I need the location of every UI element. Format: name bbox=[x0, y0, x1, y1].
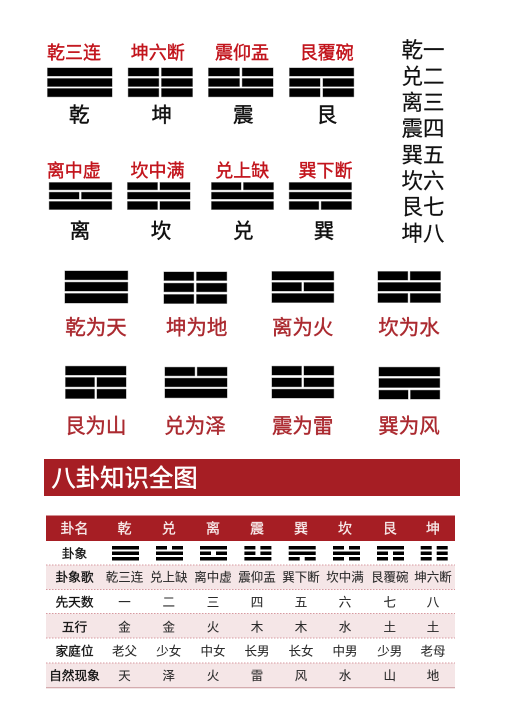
trigram: 艮覆碗 bbox=[289, 43, 354, 127]
symbol: 兑为泽 bbox=[164, 367, 227, 438]
row: 卦象歌: 坤六断 bbox=[414, 570, 452, 584]
symbol: 坎为水: 坎为水 bbox=[378, 316, 440, 340]
row: 卦象歌: 离中虚 bbox=[194, 570, 232, 584]
row: 卦象 with small trigram icons bbox=[62, 546, 448, 561]
row: 先天数: 先天数 bbox=[55, 596, 94, 610]
row: 先天数: 五 bbox=[295, 596, 307, 610]
symbol: 巽为风 bbox=[378, 367, 440, 438]
text block: pre-heaven numbers: 震四 bbox=[401, 117, 445, 141]
row: 家庭位: 中男 bbox=[332, 644, 358, 658]
row: 先天数: 六 bbox=[339, 596, 351, 610]
row: 卦象歌: 巽下断 bbox=[282, 570, 320, 584]
trigram: 离中虚 bbox=[47, 161, 112, 243]
symbol: 震为雷: 震为雷 bbox=[272, 415, 333, 438]
trigram: 坤六断: 坤 bbox=[151, 104, 172, 127]
trigram: 兑上缺 bbox=[211, 161, 274, 243]
table header row: 艮 bbox=[383, 520, 397, 536]
row: 卦象 with small trigram icons: 卦象 bbox=[62, 547, 87, 561]
text block: pre-heaven numbers: 乾一 bbox=[401, 38, 445, 62]
row: 自然现象: 天 bbox=[118, 669, 131, 683]
row: 家庭位: 少男 bbox=[377, 644, 402, 658]
row: 卦象歌: 乾三连 bbox=[106, 570, 144, 584]
row: 家庭位 bbox=[55, 644, 446, 658]
row: 家庭位: 长女 bbox=[288, 644, 314, 658]
row: 家庭位: 中女 bbox=[200, 644, 226, 658]
table header row: 震 bbox=[250, 520, 264, 536]
row: 自然现象: 自然现象 bbox=[49, 668, 100, 683]
heading banner bbox=[44, 459, 460, 496]
row: 五行 bbox=[62, 620, 439, 634]
table header row: 坤 bbox=[426, 520, 440, 536]
trigram: 乾三连: 乾 bbox=[69, 104, 90, 127]
table header row bbox=[46, 516, 455, 541]
symbol: 震为雷 bbox=[272, 366, 334, 438]
text block: pre-heaven numbers: 艮七 bbox=[401, 196, 445, 220]
row: 先天数: 七 bbox=[383, 596, 396, 610]
symbol: 坎为水 bbox=[378, 271, 441, 340]
trigram: 离中虚: 离 bbox=[70, 220, 90, 243]
row: 自然现象 bbox=[49, 668, 440, 683]
trigram: 乾三连 bbox=[47, 43, 112, 127]
symbol: 兑为泽: 兑为泽 bbox=[164, 415, 226, 438]
row: 先天数: 二 bbox=[162, 596, 175, 610]
table header row: 兑 bbox=[162, 520, 176, 536]
row: 自然现象: 风 bbox=[295, 669, 308, 683]
trigram: 坤六断 bbox=[128, 43, 193, 127]
row: 自然现象: 山 bbox=[383, 669, 396, 683]
symbol: 坤为地 bbox=[164, 272, 227, 340]
row: 卦象歌: 坎中满 bbox=[326, 570, 364, 584]
trigram: 兑上缺: 兑 bbox=[233, 220, 254, 243]
heading banner: 八卦知识全图 bbox=[51, 466, 198, 492]
row: 先天数: 一 bbox=[118, 596, 131, 610]
row: 卦象歌: 震仰盂 bbox=[238, 570, 276, 584]
trigram: 坎中满: 坎中满 bbox=[130, 161, 184, 181]
row: 卦象歌: 卦象歌 bbox=[55, 570, 94, 584]
trigram: 巽下断 bbox=[289, 161, 352, 243]
row: 卦象歌: 艮覆碗 bbox=[371, 570, 408, 584]
trigram: 坎中满 bbox=[127, 161, 190, 243]
symbol: 艮为山 bbox=[65, 366, 126, 438]
text block: pre-heaven numbers: 离三 bbox=[401, 91, 445, 115]
row: 自然现象: 火 bbox=[207, 669, 220, 683]
text block: pre-heaven numbers: 兑二 bbox=[401, 65, 445, 89]
table header row: 离 bbox=[206, 520, 220, 536]
row: 自然现象: 泽 bbox=[162, 669, 175, 683]
row: 自然现象: 地 bbox=[427, 669, 440, 683]
row: 五行: 火 bbox=[207, 620, 220, 634]
trigram: 离中虚: 离中虚 bbox=[47, 161, 101, 181]
symbol: 离为火: 离为火 bbox=[272, 316, 333, 340]
trigram: 乾三连: 乾三连 bbox=[47, 43, 101, 63]
row: 五行: 木 bbox=[251, 620, 264, 634]
trigram: 坤六断: 坤六断 bbox=[131, 43, 185, 63]
row: 五行: 金 bbox=[162, 620, 175, 634]
row: 卦象歌: 兑上缺 bbox=[150, 570, 188, 584]
trigram: 震仰盂: 震仰盂 bbox=[215, 43, 269, 63]
text block: pre-heaven numbers: 巽五 bbox=[401, 144, 445, 168]
row: 五行: 五行 bbox=[62, 620, 87, 634]
trigram: 兑上缺: 兑上缺 bbox=[215, 161, 269, 181]
symbol: 乾为天: 乾为天 bbox=[65, 316, 127, 340]
row: 先天数: 八 bbox=[427, 596, 440, 610]
trigram: 坎中满: 坎 bbox=[151, 220, 171, 243]
symbol: 巽为风: 巽为风 bbox=[378, 415, 440, 438]
row: 五行: 木 bbox=[295, 620, 308, 634]
row: 先天数 bbox=[55, 596, 440, 610]
trigram: 艮覆碗: 艮覆碗 bbox=[300, 43, 354, 63]
row: 家庭位: 家庭位 bbox=[55, 644, 94, 658]
symbol: 乾为天 bbox=[65, 271, 128, 340]
row: 先天数: 三 bbox=[207, 596, 219, 610]
trigram: 震仰盂 bbox=[208, 43, 273, 127]
text block: pre-heaven numbers bbox=[401, 38, 445, 246]
trigram: 巽下断: 巽 bbox=[314, 220, 334, 243]
trigram: 艮覆碗: 艮 bbox=[316, 104, 337, 127]
symbol: 离为火 bbox=[272, 271, 334, 340]
row: 家庭位: 长男 bbox=[244, 644, 270, 658]
table: bagua knowledge bbox=[46, 516, 455, 688]
row: 五行: 土 bbox=[383, 620, 396, 634]
row: 五行: 水 bbox=[339, 620, 352, 634]
row: 家庭位: 少女 bbox=[156, 644, 181, 658]
row: 五行: 金 bbox=[118, 620, 131, 634]
symbol: 坤为地: 坤为地 bbox=[166, 316, 227, 340]
row: 自然现象: 水 bbox=[339, 669, 352, 683]
table header row: 巽 bbox=[294, 520, 308, 536]
table header row: 乾 bbox=[118, 520, 132, 536]
trigram: 震仰盂: 震 bbox=[233, 104, 254, 127]
trigram: 巽下断: 巽下断 bbox=[298, 161, 352, 181]
row: 卦象歌 bbox=[55, 570, 452, 584]
row: 先天数: 四 bbox=[251, 596, 263, 610]
table header row: 卦名 bbox=[60, 520, 88, 536]
text block: pre-heaven numbers: 坎六 bbox=[401, 170, 445, 194]
panel: trigram mnemonics bbox=[47, 43, 354, 243]
row: 自然现象: 雷 bbox=[251, 669, 263, 683]
text block: pre-heaven numbers: 坤八 bbox=[401, 222, 445, 246]
table row backgrounds bbox=[46, 565, 455, 688]
row: 家庭位: 老父 bbox=[112, 644, 137, 658]
table header row: 坎 bbox=[338, 520, 352, 536]
row: 五行: 土 bbox=[427, 620, 439, 634]
symbol: 艮为山: 艮为山 bbox=[65, 415, 126, 438]
row: 家庭位: 老母 bbox=[420, 644, 446, 658]
panel: trigram nature symbols bbox=[65, 271, 441, 438]
